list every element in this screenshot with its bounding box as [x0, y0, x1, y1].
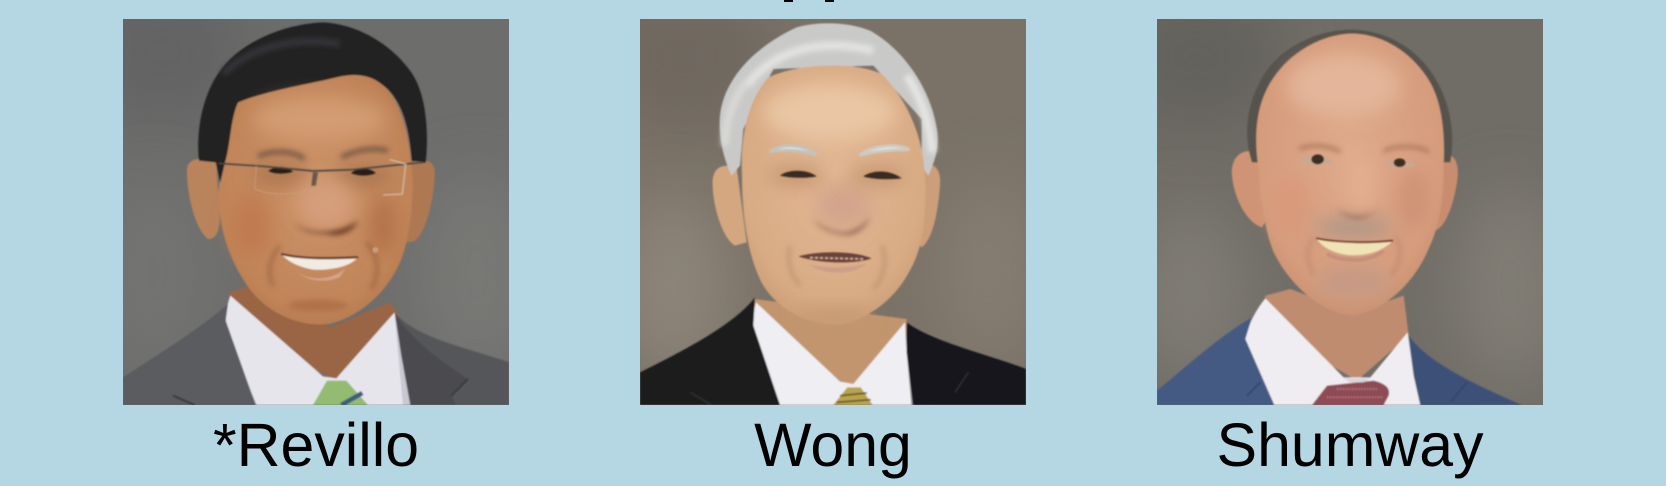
panel: Wong: [640, 19, 1026, 479]
portrait: Revillo: [123, 19, 509, 405]
panel: Shumway: [1157, 19, 1543, 479]
clipped heading descenders at top edge: [784, 0, 834, 2]
name: Revillo: *Revillo: [213, 411, 419, 479]
panel: Revillo: [123, 19, 509, 479]
name: Shumway: Shumway: [1217, 411, 1483, 479]
portrait: Shumway: [1157, 19, 1543, 405]
name: Wong: Wong: [754, 411, 912, 479]
portrait: Wong: [640, 19, 1026, 405]
